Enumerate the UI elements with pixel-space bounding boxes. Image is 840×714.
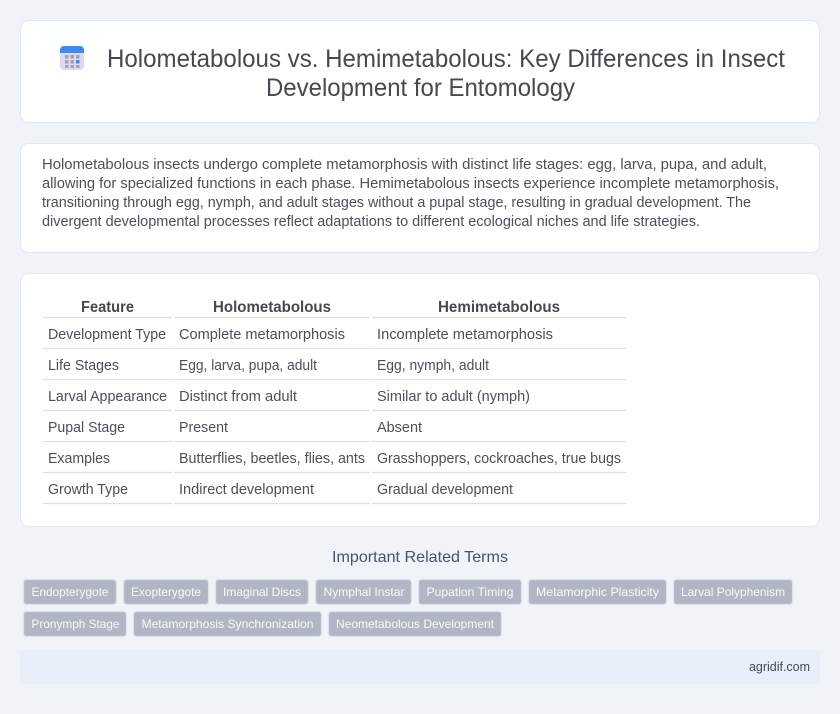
table row: pupal stage: Absent [377, 420, 422, 436]
table row: pupal stage: Pupal Stage [48, 420, 125, 436]
tag: Exopterygote [124, 580, 208, 604]
footer source text: agridif.com [749, 659, 810, 674]
table row: pupal stage [48, 420, 422, 436]
tag: Metamorphosis Synchronization [134, 612, 322, 636]
panel: comparison table [20, 274, 820, 526]
tag: Endopterygote: Endopterygote [32, 585, 109, 599]
title: Development for Entomology [266, 74, 575, 102]
related term tags [24, 580, 792, 636]
tag: Nymphal Instar: Nymphal Instar [324, 585, 404, 599]
table header row [81, 299, 560, 316]
table row: life stages [48, 358, 489, 374]
tag: Pupation Timing [418, 580, 522, 604]
text block: intro paragraph: allowing for specialized functions in each phase. Hemimetabolous insects experience incomplete metamorphosis, [42, 176, 779, 192]
tag: Exopterygote: Exopterygote [131, 585, 201, 599]
table row: pupal stage: Present [179, 420, 228, 436]
table header row: Holometabolous [213, 299, 331, 316]
table row: larval appearance: Larval Appearance [48, 389, 167, 405]
text block: intro paragraph [42, 157, 779, 230]
heading: important related terms: Important Related Terms [332, 549, 508, 566]
table row: life stages: Egg, nymph, adult [377, 358, 489, 374]
table row: examples: Examples [48, 451, 110, 467]
table row: growth type [48, 482, 513, 498]
panel: title header [20, 20, 820, 122]
title: Holometabolous vs. Hemimetabolous: Key Differences in Insect [107, 45, 785, 73]
tag: Larval Polyphenism: Larval Polyphenism [681, 585, 785, 599]
tag: Metamorphosis Synchronization: Metamorphosis Synchronization [142, 617, 314, 631]
table row: life stages: Egg, larva, pupa, adult [179, 358, 317, 374]
tag: Metamorphic Plasticity [528, 580, 666, 604]
tag: Metamorphic Plasticity: Metamorphic Plasticity [536, 585, 659, 599]
footer bar [20, 650, 820, 684]
tag: Nymphal Instar [316, 580, 412, 604]
text block: intro paragraph: transitioning through egg, nymph, and adult stages without a pupal stage, resulting in gradual development. The [42, 195, 751, 211]
table row: growth type: Indirect development [179, 482, 314, 498]
text block: intro paragraph: divergent developmental processes reflect adaptations to different ecological niches and life strategies. [42, 214, 700, 230]
tag: Pronymph Stage: Pronymph Stage [32, 617, 120, 631]
tag: Endopterygote [24, 580, 116, 604]
panel: intro description [20, 144, 820, 252]
table row: development type: Complete metamorphosis [179, 327, 345, 343]
table row: larval appearance: Similar to adult (nymph) [377, 389, 530, 405]
table row: examples [48, 451, 621, 467]
table row: growth type: Growth Type [48, 482, 128, 498]
table row: life stages: Life Stages [48, 358, 119, 374]
tag: Neometabolous Development [328, 612, 502, 636]
tag: Imaginal Discs [216, 580, 308, 604]
table row: examples: Butterflies, beetles, flies, ants [179, 451, 365, 467]
table row: development type: Incomplete metamorphosis [377, 327, 553, 343]
table row: larval appearance: Distinct from adult [179, 389, 297, 405]
table header row: Feature [81, 299, 134, 316]
tag: Neometabolous Development: Neometabolous Development [336, 617, 495, 631]
tag: Pronymph Stage [24, 612, 126, 636]
table row: growth type: Gradual development [377, 482, 513, 498]
table row: development type: Development Type [48, 327, 166, 343]
tag: Imaginal Discs: Imaginal Discs [223, 585, 301, 599]
table row: examples: Grasshoppers, cockroaches, true bugs [377, 451, 621, 467]
text block: intro paragraph: Holometabolous insects undergo complete metamorphosis with distinct life stages: egg, larva, pupa, and adult, [42, 157, 767, 173]
icon: calendar [60, 46, 84, 70]
table header row: Hemimetabolous [438, 299, 560, 316]
table row: larval appearance [48, 389, 530, 405]
title [107, 45, 785, 102]
table row: development type [48, 327, 553, 343]
tag: Pupation Timing: Pupation Timing [426, 585, 514, 599]
tag: Larval Polyphenism [674, 580, 792, 604]
